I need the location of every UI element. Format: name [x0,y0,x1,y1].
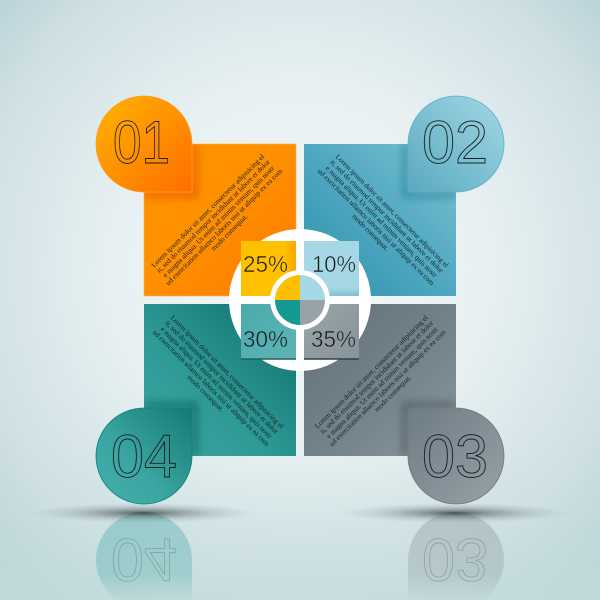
badge shadow 02 [402,144,456,198]
ground shadow left [31,503,255,523]
badge 03 [408,408,504,504]
panel: 01 orange [144,144,296,296]
text block: 03 lorem: it, sed do eiusmod tempor incididunt ut labore et dolor [319,319,436,436]
text block: 04 lorem: Lorem ipsum dolor sit amet, consectetur adipisicing el [169,314,285,430]
ground shadow right [341,503,569,523]
text block: 02 lorem: modo consequat. [350,213,391,253]
badge 03: 03 [422,423,488,490]
reflection: badge 04 [96,512,192,600]
percent square: 30% [241,304,296,359]
badge 01 [96,96,192,192]
text block: 03 lorem: Lorem ipsum dolor sit amet, consectetur adipisicing el [313,314,430,430]
panel: 02 blue [304,144,456,296]
percent square: 35%: 35% [311,326,356,352]
badge 04 [96,408,192,504]
text block: 01 lorem: it, sed do eiusmod tempor incididunt ut labore et dolor [155,158,272,275]
percent square: 35% [304,304,359,359]
text block: 02 lorem: e magna aliqua. Ut enim ad minim veniam, quis nostr [324,164,439,280]
panel: 03 gray [304,304,456,456]
text block: 02 lorem: ud exercitation ullamco laboris nisi ut aliquip ex ea com [316,167,436,287]
text block: 01 lorem: modo consequat. [210,212,250,253]
text block: 04 lorem: ud exercitation ullamco laboris nisi ut aliquip ex ea com [151,328,271,448]
text block: 01 lorem: e magna aliqua. Ut enim ad minim veniam, quis nostr [161,164,277,279]
text block: 03 lorem: modo consequat. [373,373,413,414]
text block: 04 lorem: e magna aliqua. Ut enim ad minim veniam, quis nostr [159,325,274,441]
percent square: 10% [304,241,359,296]
badge shadow 03 [402,402,456,456]
text block: 02 lorem: it, sed do eiusmod tempor incididunt ut labore et dolor [328,158,445,275]
text block: 04 lorem: modo consequat. [185,374,226,414]
badge shadow 01 [144,144,198,198]
text block: 03 lorem: ud exercitation ullamco laboris nisi ut aliquip ex ea com [328,328,448,448]
text block: 03 lorem: e magna aliqua. Ut enim ad minim veniam, quis nostr [325,325,440,440]
reflection: badge 04: 04 [111,526,177,593]
badge 01: 01 [113,109,170,176]
percent square: 30%: 30% [243,326,288,352]
badge shadow 04 [144,402,198,456]
text block: 04 lorem: it, sed do eiusmod tempor incididunt ut labore et dolor [163,319,280,436]
center ring chart [270,270,330,330]
percent square: 25%: 25% [243,251,288,277]
text block: 02 lorem: Lorem ipsum dolor sit amet, consectetur adipisicing el [334,153,450,269]
reflection: badge 03 [408,512,504,600]
text block: 01 lorem: Lorem ipsum dolor sit amet, consectetur adipisicing el [150,153,266,269]
panel: 04 teal [144,304,296,456]
badge 04: 04 [111,423,177,490]
badge 02 [408,96,504,192]
text block: 01 lorem: ud exercitation ullamco laboris nisi ut aliquip ex ea com [164,167,284,287]
percent square: 25% [241,241,296,296]
badge 02: 02 [422,109,488,176]
percent square: 10%: 10% [312,251,356,277]
center white disc [229,229,371,371]
reflection: badge 03: 03 [422,526,488,593]
